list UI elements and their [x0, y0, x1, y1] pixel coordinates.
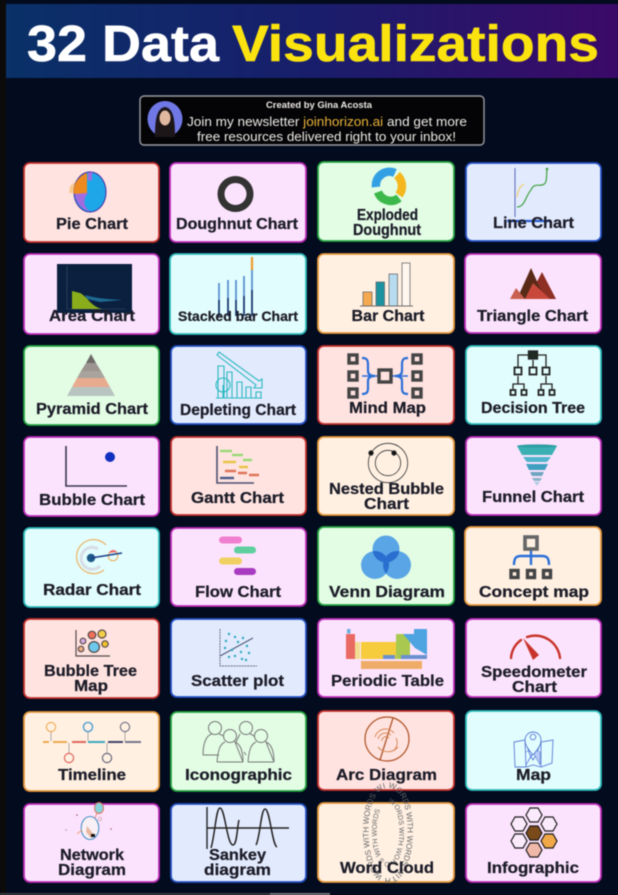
icon: exploded doughnut — [376, 172, 402, 201]
label: Funnel Chart — [482, 489, 584, 506]
label line 2: diagram — [204, 862, 271, 879]
icon: scatter — [220, 629, 257, 666]
card: line chart — [466, 163, 601, 241]
card: gantt chart — [171, 437, 306, 515]
card: bubble chart — [24, 437, 159, 516]
label line 2: Chart — [512, 679, 557, 696]
card: arc diagram — [318, 711, 454, 790]
label: Map — [516, 767, 551, 784]
icon: stacked bars — [219, 257, 252, 316]
card: bar chart — [318, 254, 454, 333]
label: Infographic — [487, 860, 579, 877]
icon: doughnut — [221, 180, 250, 208]
label: Line Chart — [493, 215, 574, 232]
title: 32 Data: 32 Data — [27, 15, 220, 72]
label line 2: Doughnut — [353, 222, 421, 239]
icon: triangles — [510, 268, 556, 299]
label: Gantt Chart — [191, 490, 284, 507]
card: network diagram — [24, 802, 159, 882]
icon: bars — [360, 263, 413, 306]
label: Decision Tree — [481, 400, 585, 417]
label: Word Cloud — [340, 860, 434, 877]
label: Venn Diagram — [329, 584, 445, 601]
card: concept map — [465, 527, 601, 605]
card: map — [466, 711, 601, 790]
card: iconographic — [171, 712, 306, 791]
newsletter line 2: free resources delivered right to your inbox! — [197, 130, 456, 144]
icon: concept map — [511, 537, 550, 578]
icon: gantt — [217, 446, 259, 483]
icon: arc — [365, 717, 409, 761]
icon: author avatar — [148, 101, 182, 137]
label: Scatter plot — [191, 673, 284, 690]
newsletter line 1: Join my newsletter joinhorizon.ai and get more — [187, 115, 467, 129]
card: radar chart — [24, 528, 159, 607]
card: bubble tree map — [24, 619, 159, 698]
icon: hexagons — [511, 808, 557, 857]
label: Mind Map — [349, 400, 426, 417]
label: Pyramid Chart — [36, 401, 148, 418]
icon: bubble tree — [76, 630, 110, 656]
card: exploded doughnut — [318, 162, 454, 241]
card: stacked bar chart — [170, 254, 306, 334]
label line 1: Sankey — [209, 847, 266, 864]
credit line: Created by Gina Acosta — [266, 100, 373, 110]
icon: people — [203, 722, 274, 762]
icon: depleting — [216, 352, 262, 398]
label: Iconographic — [185, 767, 292, 784]
label: Arc Diagram — [336, 767, 437, 784]
label: Concept map — [479, 584, 589, 601]
label: Triangle Chart — [477, 308, 588, 325]
label: Area Chart — [49, 308, 135, 325]
icon: pyramid — [67, 354, 115, 396]
card: infographic — [466, 804, 601, 882]
icon: sankey waves — [207, 807, 289, 849]
label line 1: Exploded — [357, 207, 418, 224]
card: depleting chart — [171, 346, 306, 424]
newsletter callout — [140, 96, 484, 145]
icon: venn — [361, 536, 411, 579]
card: triangle chart — [465, 254, 601, 333]
icon: speedometer — [511, 636, 560, 660]
label: Depleting Chart — [180, 402, 296, 419]
title: Visualizations: Visualizations — [232, 15, 599, 72]
card: periodic table — [318, 619, 454, 697]
card: timeline — [24, 712, 159, 791]
card: pie chart — [24, 163, 159, 242]
card: doughnut chart — [170, 163, 306, 242]
label line 1: Network — [60, 847, 124, 864]
label line 2: Map — [74, 678, 108, 695]
icon: periodic table — [346, 629, 427, 669]
card: flow chart — [171, 528, 306, 606]
card: venn diagram — [318, 527, 454, 605]
label: Periodic Table — [331, 673, 444, 690]
label line 1: Nested Bubble — [329, 481, 444, 498]
icon: line chart — [507, 168, 550, 221]
label: Doughnut Chart — [176, 216, 298, 233]
icon: decision tree — [510, 351, 554, 395]
card: area chart — [24, 254, 159, 334]
icon: timeline — [43, 722, 141, 763]
label line 1: Speedometer — [481, 664, 587, 681]
label line 1: Bubble Tree — [44, 663, 137, 680]
card: pyramid chart — [24, 346, 159, 425]
icon: funnel — [517, 444, 557, 486]
card: decision tree — [466, 346, 601, 424]
title banner — [6, 4, 618, 78]
card: mind map — [318, 346, 454, 424]
label: Bubble Chart — [39, 492, 145, 509]
card: speedometer chart — [466, 619, 601, 697]
icon: pie — [69, 172, 106, 212]
icon: mind map — [349, 355, 421, 397]
icon: word ring: WORDS WITH WORDS WITH WORDS — [371, 798, 405, 868]
card: word cloud — [316, 782, 456, 884]
icon: network — [65, 802, 112, 840]
card: scatter plot — [171, 619, 306, 697]
label: Radar Chart — [43, 582, 141, 599]
card: nested bubble chart — [318, 437, 454, 515]
icon: map pin — [514, 732, 553, 767]
card: sankey diagram — [171, 804, 306, 882]
label: Stacked bar Chart — [178, 309, 299, 324]
icon: word ring — [362, 782, 414, 884]
icon: word ring: WORDS WITH WORDS WITH WORDS WITH WORDS WITH WORDS — [362, 782, 414, 884]
label line 2: Chart — [364, 496, 409, 513]
label line 2: Diagram — [58, 862, 126, 879]
card: funnel chart — [466, 437, 601, 515]
label: Bar Chart — [352, 308, 424, 325]
icon: radar — [77, 540, 122, 574]
label: Timeline — [58, 767, 126, 784]
label: Flow Chart — [195, 584, 281, 601]
icon: area chart — [57, 264, 132, 313]
icon: flow chart pills — [219, 536, 256, 575]
label: Pie Chart — [56, 216, 128, 233]
icon: nested bubbles — [368, 443, 408, 483]
icon: bubble chart — [66, 446, 127, 486]
